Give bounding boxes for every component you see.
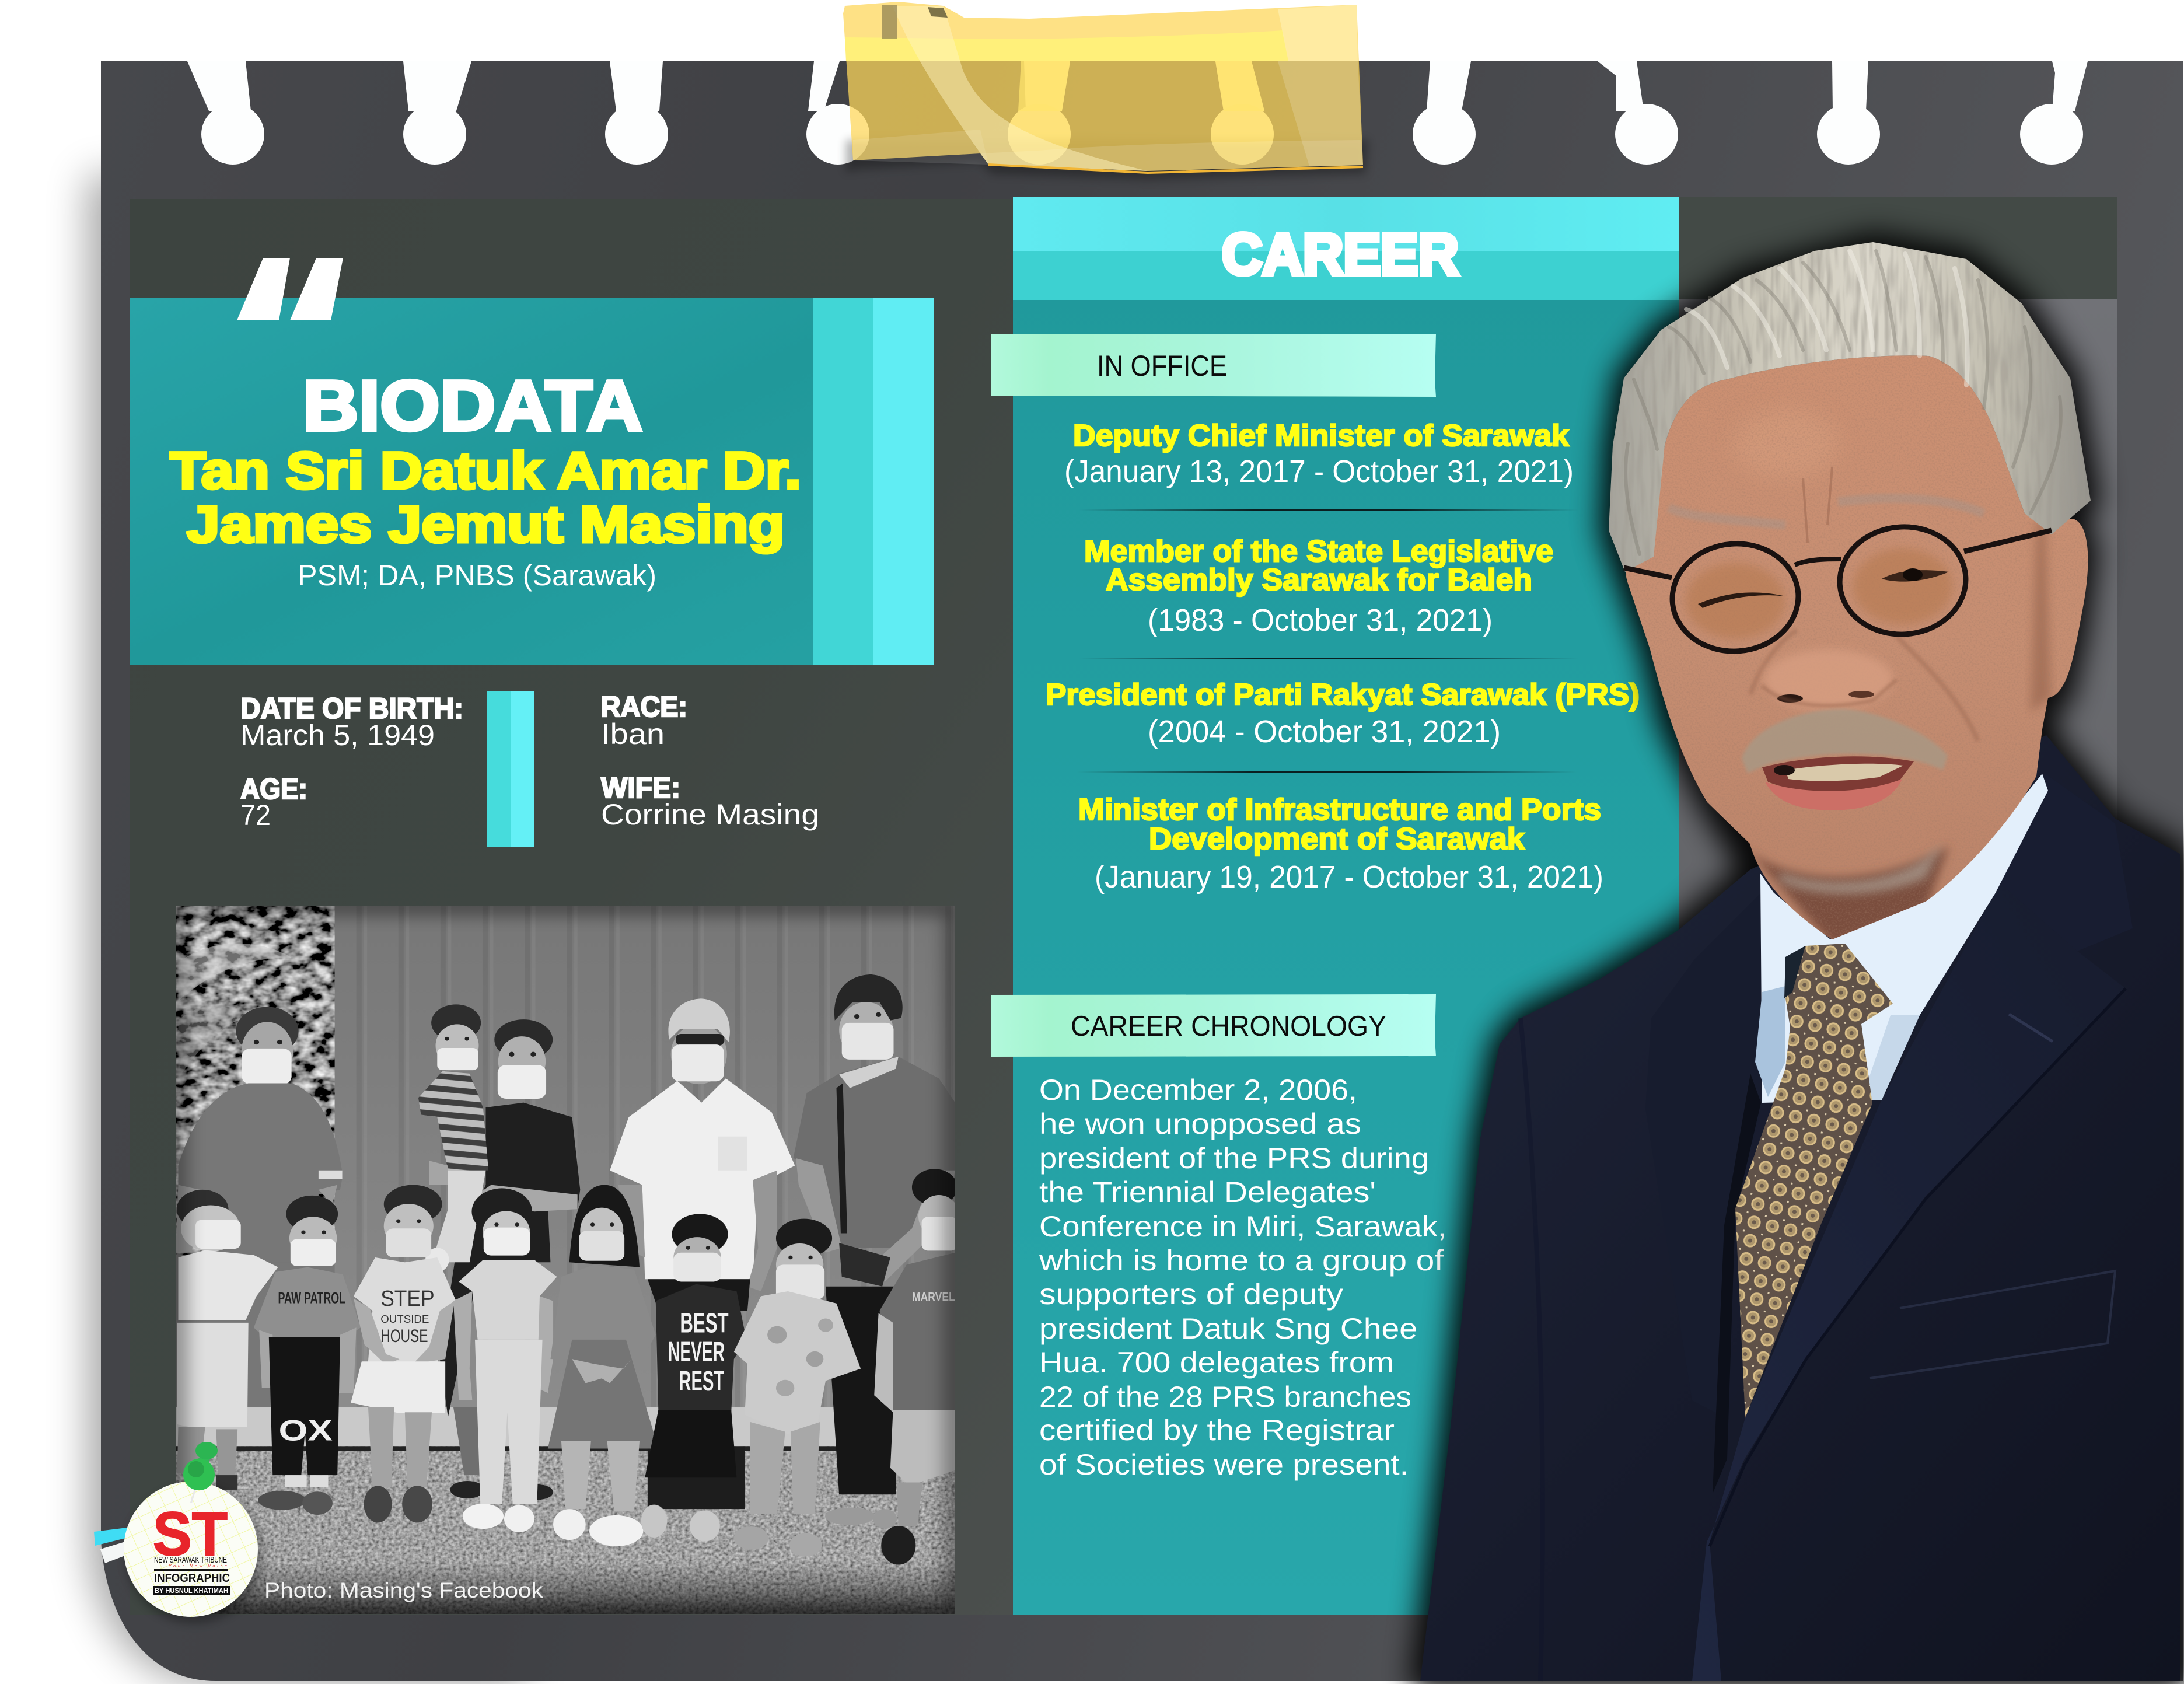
text block: career chronology: of Societies were present. — [1039, 1448, 1409, 1481]
child 4 white outfit — [453, 1188, 557, 1532]
logo: new sarawak tribune badge — [94, 1482, 263, 1623]
photo: group with children — [176, 906, 959, 1614]
heading: biodata: BIODATA — [303, 366, 642, 445]
text block: career chronology: which is home to a group of — [1039, 1244, 1444, 1277]
text block: career chronology: Conference in Miri, Sarawak, — [1039, 1210, 1446, 1243]
text block: career chronology: he won unopposed as — [1039, 1107, 1361, 1140]
corrugated wall — [335, 906, 955, 1453]
panel: career — [991, 197, 1679, 1615]
right collar — [2000, 774, 2133, 951]
spiral binding holes — [187, 61, 2088, 165]
icon: green push pin — [183, 1442, 218, 1503]
wife: Corrine Masing — [601, 798, 819, 831]
adult: Masing in white shirt — [610, 998, 795, 1509]
eyes — [1686, 548, 1952, 639]
text block: career chronology: supporters of deputy — [1039, 1278, 1343, 1311]
text block: career chronology: president Datuk Sng Chee — [1039, 1312, 1417, 1345]
office: infrastructure minister: Minister of Infrastructure and Ports — [1078, 793, 1601, 827]
date of birth: March 5, 1949 — [240, 719, 435, 752]
office: infrastructure minister: Development of Sarawak — [1149, 822, 1525, 856]
adult: woman left in grey polo — [176, 1007, 343, 1262]
office: infrastructure minister — [1078, 793, 1603, 895]
text block: career chronology — [1039, 1074, 1446, 1481]
adult: woman right with shoulder bag — [794, 974, 955, 1528]
child 6 best never rest — [641, 1214, 746, 1542]
child 3 step outside: OUTSIDE — [380, 1314, 429, 1326]
shirt collar — [1755, 774, 2048, 1103]
pavement — [176, 1407, 955, 1614]
round spectacles — [1624, 523, 2052, 655]
logo: new sarawak tribune badge: NEW SARAWAK TRIBUNE — [154, 1555, 227, 1565]
wife: WIFE: — [601, 771, 680, 804]
wife — [601, 771, 819, 831]
child 3 step outside — [351, 1185, 456, 1522]
panel: personal details — [240, 690, 819, 847]
office: state assembly member: (1983 - October 31, 2021) — [1148, 603, 1493, 638]
office: state assembly member — [1084, 534, 1553, 638]
office: PRS president — [1046, 678, 1640, 749]
child 2 paw patrol — [254, 1196, 361, 1515]
logo: new sarawak tribune badge: BY HUSNUL KHATIMAH — [155, 1587, 228, 1595]
race — [601, 690, 687, 750]
neck and face — [1622, 350, 2095, 945]
board shadow — [88, 175, 525, 1684]
date of birth — [240, 692, 463, 752]
logo: new sarawak tribune badge: INFOGRAPHIC — [154, 1572, 230, 1585]
office: PRS president: (2004 - October 31, 2021) — [1148, 714, 1501, 749]
text block: career chronology: 22 of the 28 PRS branches — [1039, 1381, 1411, 1413]
panel: biodata header — [130, 258, 934, 665]
office: deputy chief minister: (January 13, 2017 - October 31, 2021) — [1064, 454, 1574, 489]
text block: career chronology: certified by the Registrar — [1039, 1414, 1395, 1447]
label: in office: IN OFFICE — [1097, 350, 1227, 382]
name line two: James Jemut Masing — [187, 495, 785, 553]
child 8 marvel shirt: MARVEL — [912, 1290, 955, 1304]
right lapel — [1692, 883, 2126, 1681]
heading: career: CAREER — [1222, 222, 1459, 287]
necktie — [1735, 944, 1893, 1418]
breast pocket — [1870, 1271, 2115, 1378]
age: 72 — [240, 799, 271, 831]
foliage — [176, 906, 336, 1255]
suit jacket — [1420, 735, 2180, 1681]
child 6 best never rest: NEVER — [668, 1336, 725, 1368]
portrait shadow — [1420, 242, 2180, 1681]
yellow tape — [843, 2, 1368, 180]
career header band — [1013, 197, 1679, 300]
text block: career chronology: president of the PRS during — [1039, 1142, 1429, 1175]
age — [240, 773, 307, 831]
moustache and goatee — [1742, 709, 1948, 894]
office: state assembly member: Member of the State Legislative — [1084, 534, 1553, 568]
age: AGE: — [240, 773, 307, 805]
icon: quotation mark — [237, 258, 343, 320]
text block: career chronology: Hua. 700 delegates from — [1039, 1346, 1394, 1379]
child 7 floral top — [734, 1219, 861, 1556]
label: career chronology — [991, 994, 1436, 1057]
text block: career chronology: the Triennial Delegates' — [1039, 1176, 1376, 1208]
silver hair — [1605, 239, 2095, 575]
logo letters: ST — [153, 1500, 228, 1568]
divider stripes — [487, 691, 534, 847]
office: PRS president: President of Parti Rakyat Sarawak (PRS) — [1046, 678, 1640, 712]
label: career chronology: CAREER CHRONOLOGY — [1071, 1011, 1386, 1042]
child 1 in white — [177, 1190, 278, 1490]
date of birth: DATE OF BIRTH: — [240, 692, 463, 725]
portrait: James Masing — [1420, 239, 2180, 1681]
text block: career chronology: On December 2, 2006, — [1039, 1074, 1357, 1106]
child 8 marvel shirt — [874, 1169, 959, 1564]
inner panel: grey backdrop behind portrait — [1679, 197, 2117, 941]
mouth — [1762, 756, 1914, 810]
race: Iban — [601, 718, 665, 750]
office: state assembly member: Assembly Sarawak for Baleh — [1106, 563, 1532, 597]
honorifics: PSM; DA, PNBS (Sarawak) — [298, 559, 656, 592]
child 3 step outside: HOUSE — [380, 1326, 428, 1347]
office: deputy chief minister — [1064, 419, 1574, 489]
child 3 step outside: STEP — [380, 1285, 435, 1311]
label: in office — [991, 334, 1436, 397]
child 2 paw patrol: PAW PATROL — [278, 1290, 345, 1306]
name line one: Tan Sri Datuk Amar Dr. — [170, 441, 801, 499]
inner panel: left dark panel — [130, 199, 1017, 1615]
logo: new sarawak tribune badge: Your New Voice — [169, 1564, 227, 1568]
race: RACE: — [601, 690, 687, 723]
child 5 in dress — [548, 1185, 658, 1546]
photo vignette — [176, 906, 955, 1614]
photo credit: Photo: Masing's Facebook — [264, 1578, 544, 1602]
nose — [1762, 649, 1896, 710]
child: held toddler in striped shirt — [418, 1004, 488, 1272]
office: deputy chief minister: Deputy Chief Minister of Sarawak — [1073, 419, 1569, 453]
left lapel — [1645, 893, 1763, 1418]
office: infrastructure minister: (January 19, 2017 - October 31, 2021) — [1095, 860, 1603, 895]
child 6 best never rest: REST — [679, 1365, 724, 1396]
child 6 best never rest: BEST — [680, 1307, 729, 1339]
tape strips — [94, 1527, 154, 1563]
child 2 paw patrol: OX — [278, 1414, 333, 1447]
adult: woman in black polo — [440, 1019, 580, 1500]
